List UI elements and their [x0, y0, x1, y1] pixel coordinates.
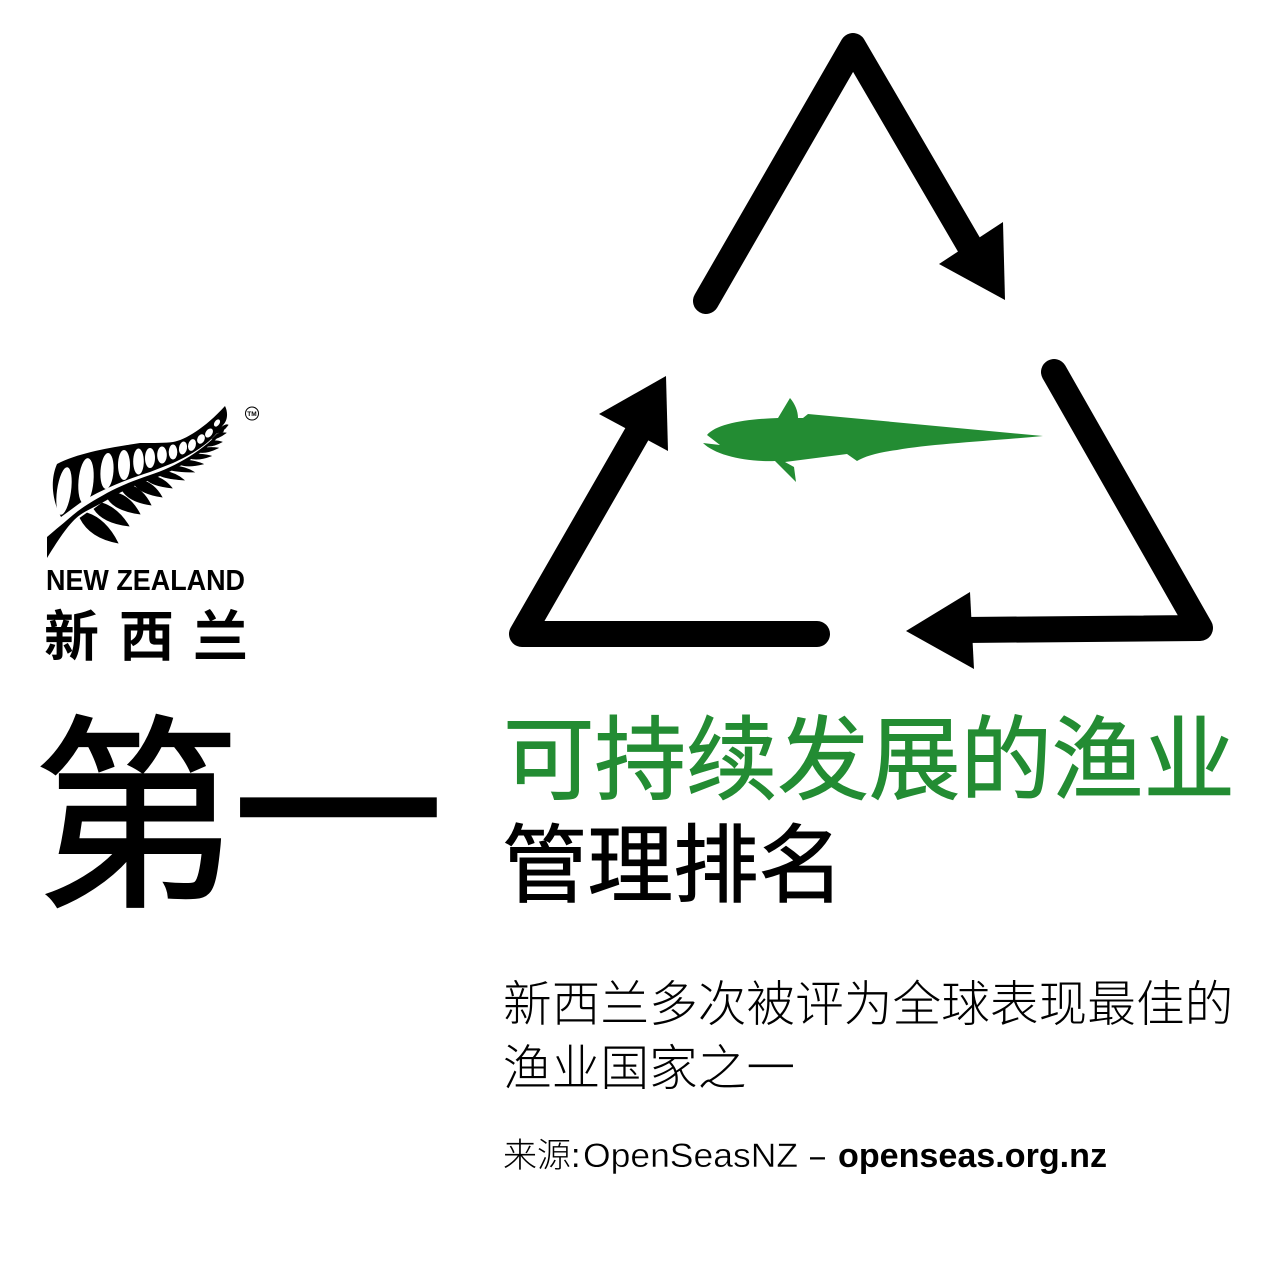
heading: 第一: 一	[232, 698, 444, 935]
logo: New Zealand fern	[44, 406, 258, 668]
text block: source: openseas.org.nz	[838, 1137, 1107, 1175]
logo text: NEW ZEALAND: NEW ZEALAND	[46, 565, 245, 597]
heading: 第一: 第	[33, 703, 240, 934]
text block: description: 新西兰多次被评为全球表现最佳的	[503, 978, 1233, 1032]
logo text: 新西兰: 新西兰	[44, 606, 248, 668]
text block: description	[503, 978, 1233, 1096]
icon: silver fern	[47, 406, 228, 558]
text block: source	[503, 1137, 1107, 1175]
text block: source: OpenSeasNZ	[583, 1137, 798, 1175]
text block: source: 来源:	[503, 1137, 580, 1175]
icon: trademark: TM	[247, 411, 257, 418]
heading: green title: 可持续发展的渔业	[503, 710, 1235, 812]
arrow: bottom right	[906, 372, 1200, 669]
icon: trademark	[246, 407, 258, 420]
text block: description: 渔业国家之一	[503, 1042, 795, 1096]
text block: source: –	[810, 1137, 825, 1175]
icon: green fish	[703, 398, 1043, 482]
arrow: top right	[706, 46, 1005, 301]
heading: black subtitle: 管理排名	[502, 819, 844, 914]
recycling triangle arrows	[522, 46, 1200, 669]
arrow: left	[522, 376, 817, 634]
